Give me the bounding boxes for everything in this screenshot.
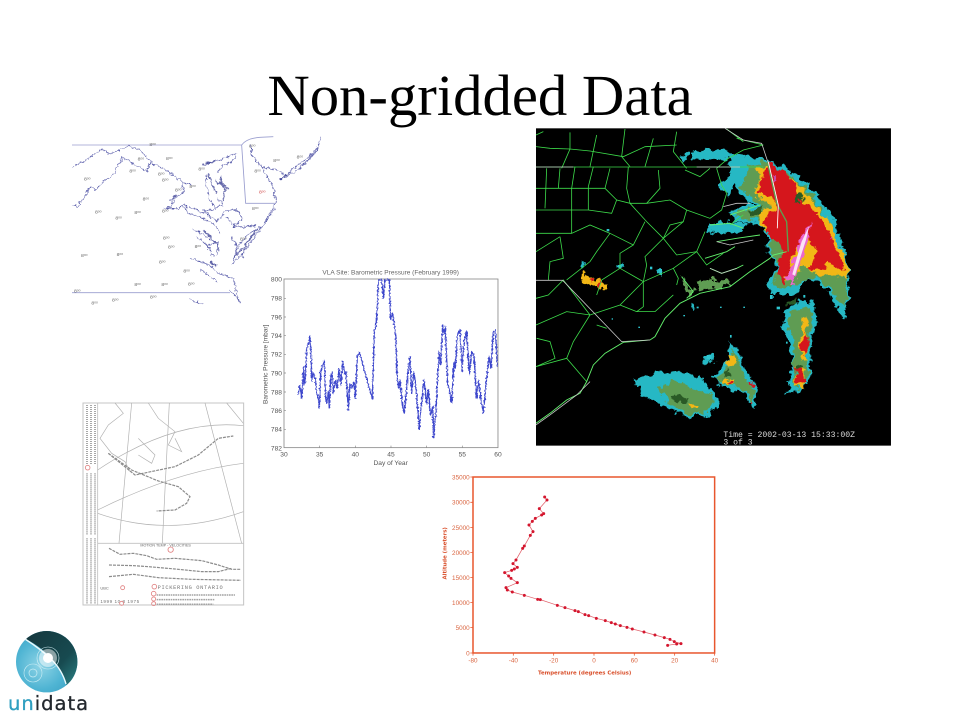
x axis labels: 40 (352, 452, 359, 459)
side data table (87, 405, 95, 603)
hurricane track chart (83, 403, 244, 606)
county lines (536, 129, 763, 382)
station markers: 8ᵒᵒ (138, 157, 144, 163)
station markers: 8ᵒᵒ (168, 245, 175, 251)
station markers: 8ᵒᵒ (161, 282, 168, 288)
magenta core (787, 222, 812, 287)
x axis title: Day of Year (373, 460, 409, 467)
station markers: 8ᵒᵒ (117, 252, 123, 258)
x axis labels: 40 (711, 657, 719, 664)
station markers: 8ᵒᵒ (162, 209, 169, 215)
station markers: 8ᵒᵒ (129, 168, 136, 174)
station markers: 8ᵒᵒ (198, 167, 205, 173)
scattered echo specks (607, 229, 805, 359)
radar echoes (580, 149, 849, 418)
y axis labels: 35000 (452, 474, 470, 481)
station markers: 8ᵒᵒ (95, 209, 102, 215)
station markers: 8ᵒᵒ (162, 177, 169, 183)
y axis labels: 794 (271, 333, 282, 340)
station markers: 8ᵒᵒ (273, 158, 280, 164)
x axis labels: -40 (509, 657, 518, 664)
station markers: 8ᵒᵒ (149, 142, 156, 148)
red circled markers (85, 465, 173, 606)
y axis labels: 784 (271, 427, 282, 434)
y axis labels: 786 (271, 408, 282, 415)
x axis labels: 0 (592, 657, 596, 664)
yellow echoes (581, 163, 848, 408)
radar image (536, 128, 891, 448)
station markers: 8ᵒᵒ (81, 253, 88, 259)
station markers: 8ᵒᵒ (84, 176, 91, 182)
station markers: 8ᵒᵒ (159, 260, 166, 266)
y axis labels (271, 277, 282, 452)
x axis labels: 20 (671, 657, 679, 664)
y axis labels: 788 (271, 389, 282, 396)
station markers: 8ᵒᵒ (112, 298, 119, 304)
sounding points (503, 495, 682, 647)
x axis labels: 45 (387, 452, 395, 459)
y axis labels: 15000 (452, 575, 470, 582)
chart heading: MOTION TEMP - VELOCITIES (140, 544, 191, 548)
line chart: temperature sounding (442, 474, 719, 676)
map grid (98, 403, 243, 543)
coastline (536, 205, 787, 423)
chart title: VLA Site: Barometric Pressure (February 1999) (322, 270, 459, 277)
legend lines (157, 595, 235, 604)
x axis labels (468, 657, 719, 664)
plot frame (473, 477, 715, 653)
station markers (74, 142, 303, 307)
y axis labels: 798 (271, 296, 282, 303)
logo globe (15, 630, 80, 694)
pressure trace (298, 280, 497, 438)
state boundaries (536, 128, 770, 425)
station markers: 8ᵒᵒ (259, 190, 266, 196)
green echoes (658, 162, 847, 415)
station markers: 8ᵒᵒ (254, 169, 261, 175)
station markers: 8ᵒᵒ (158, 172, 165, 178)
station markers: 8ᵒᵒ (143, 197, 149, 203)
station markers: 8ᵒᵒ (134, 210, 141, 216)
title: Non-gridded Data (267, 63, 693, 128)
station markers: 8ᵒᵒ (166, 156, 173, 162)
x axis labels: 30 (280, 452, 288, 459)
station markers: 8ᵒᵒ (134, 282, 141, 288)
lower time series (109, 548, 241, 580)
x axis labels: 35 (316, 452, 324, 459)
line chart: barometric pressure (263, 270, 502, 467)
station markers: 8ᵒᵒ (115, 216, 122, 222)
y axis labels: 796 (271, 314, 282, 321)
y axis labels (452, 474, 470, 657)
y axis labels: 782 (271, 445, 282, 452)
station markers: 8ᵒᵒ (240, 237, 247, 243)
coastlines and rivers (72, 137, 321, 304)
axis ticks (470, 477, 715, 656)
map: surface stations (72, 137, 321, 307)
x axis labels: 60 (494, 452, 502, 459)
axis ticks (284, 298, 462, 448)
y axis labels: 792 (271, 352, 282, 359)
y axis labels: 30000 (452, 500, 470, 507)
station markers: 8ᵒᵒ (150, 294, 157, 300)
station markers: 8ᵒᵒ (249, 143, 256, 149)
y axis labels: 790 (271, 370, 282, 377)
cyan outer echoes (580, 149, 849, 418)
station markers: 8ᵒᵒ (195, 244, 201, 250)
y axis labels: 800 (271, 277, 282, 284)
storm-side boundary lines (767, 162, 788, 252)
x axis labels: 50 (423, 452, 431, 459)
location caption: PICKERING ONTARIO (158, 585, 223, 591)
x axis title: Temperature (degrees Celsius) (538, 670, 631, 676)
x axis labels: -80 (468, 657, 478, 664)
storm tracks (108, 436, 233, 511)
dense shoreline detail (170, 161, 290, 267)
station markers: 8ᵒᵒ (252, 206, 259, 212)
x axis labels: 55 (459, 452, 466, 459)
sounding line (505, 497, 681, 645)
station markers: 8ᵒᵒ (74, 289, 81, 295)
station markers: 8ᵒᵒ (297, 154, 303, 160)
x axis labels (280, 452, 502, 459)
lower left caption: UBC (100, 586, 109, 591)
station markers: 8ᵒᵒ (163, 236, 170, 242)
red echoes (591, 162, 844, 405)
station markers: 8ᵒᵒ (91, 301, 98, 307)
chart frame (83, 403, 244, 605)
station markers: 8ᵒᵒ (188, 282, 195, 288)
logo wordmark: unidata (8, 692, 89, 715)
station markers: 8ᵒᵒ (183, 269, 190, 275)
radar image: 3 of 3 (723, 438, 753, 448)
white core streak (792, 226, 809, 276)
x axis labels: -20 (549, 657, 559, 664)
hurricane track chart: 1999 10 8 1975 (100, 599, 140, 604)
station markers: 8ᵒᵒ (175, 187, 182, 193)
y axis labels: 0 (466, 650, 470, 657)
y axis labels: 5000 (456, 625, 470, 632)
state borders (72, 137, 275, 293)
y axis labels: 20000 (452, 550, 470, 557)
plot frame (284, 279, 498, 448)
logo: unidata (10, 631, 86, 710)
timestamp: Time = 2002-03-13 15:33:00Z (723, 430, 855, 440)
station markers: 8ᵒᵒ (189, 184, 196, 190)
y axis title: Barometric Pressure [mbar] (263, 324, 270, 404)
y axis labels: 25000 (452, 525, 470, 532)
y axis labels: 10000 (452, 600, 470, 607)
x axis labels: 60 (631, 657, 638, 664)
y axis title: Altitude (meters) (442, 527, 448, 580)
dark green cores (672, 193, 805, 403)
